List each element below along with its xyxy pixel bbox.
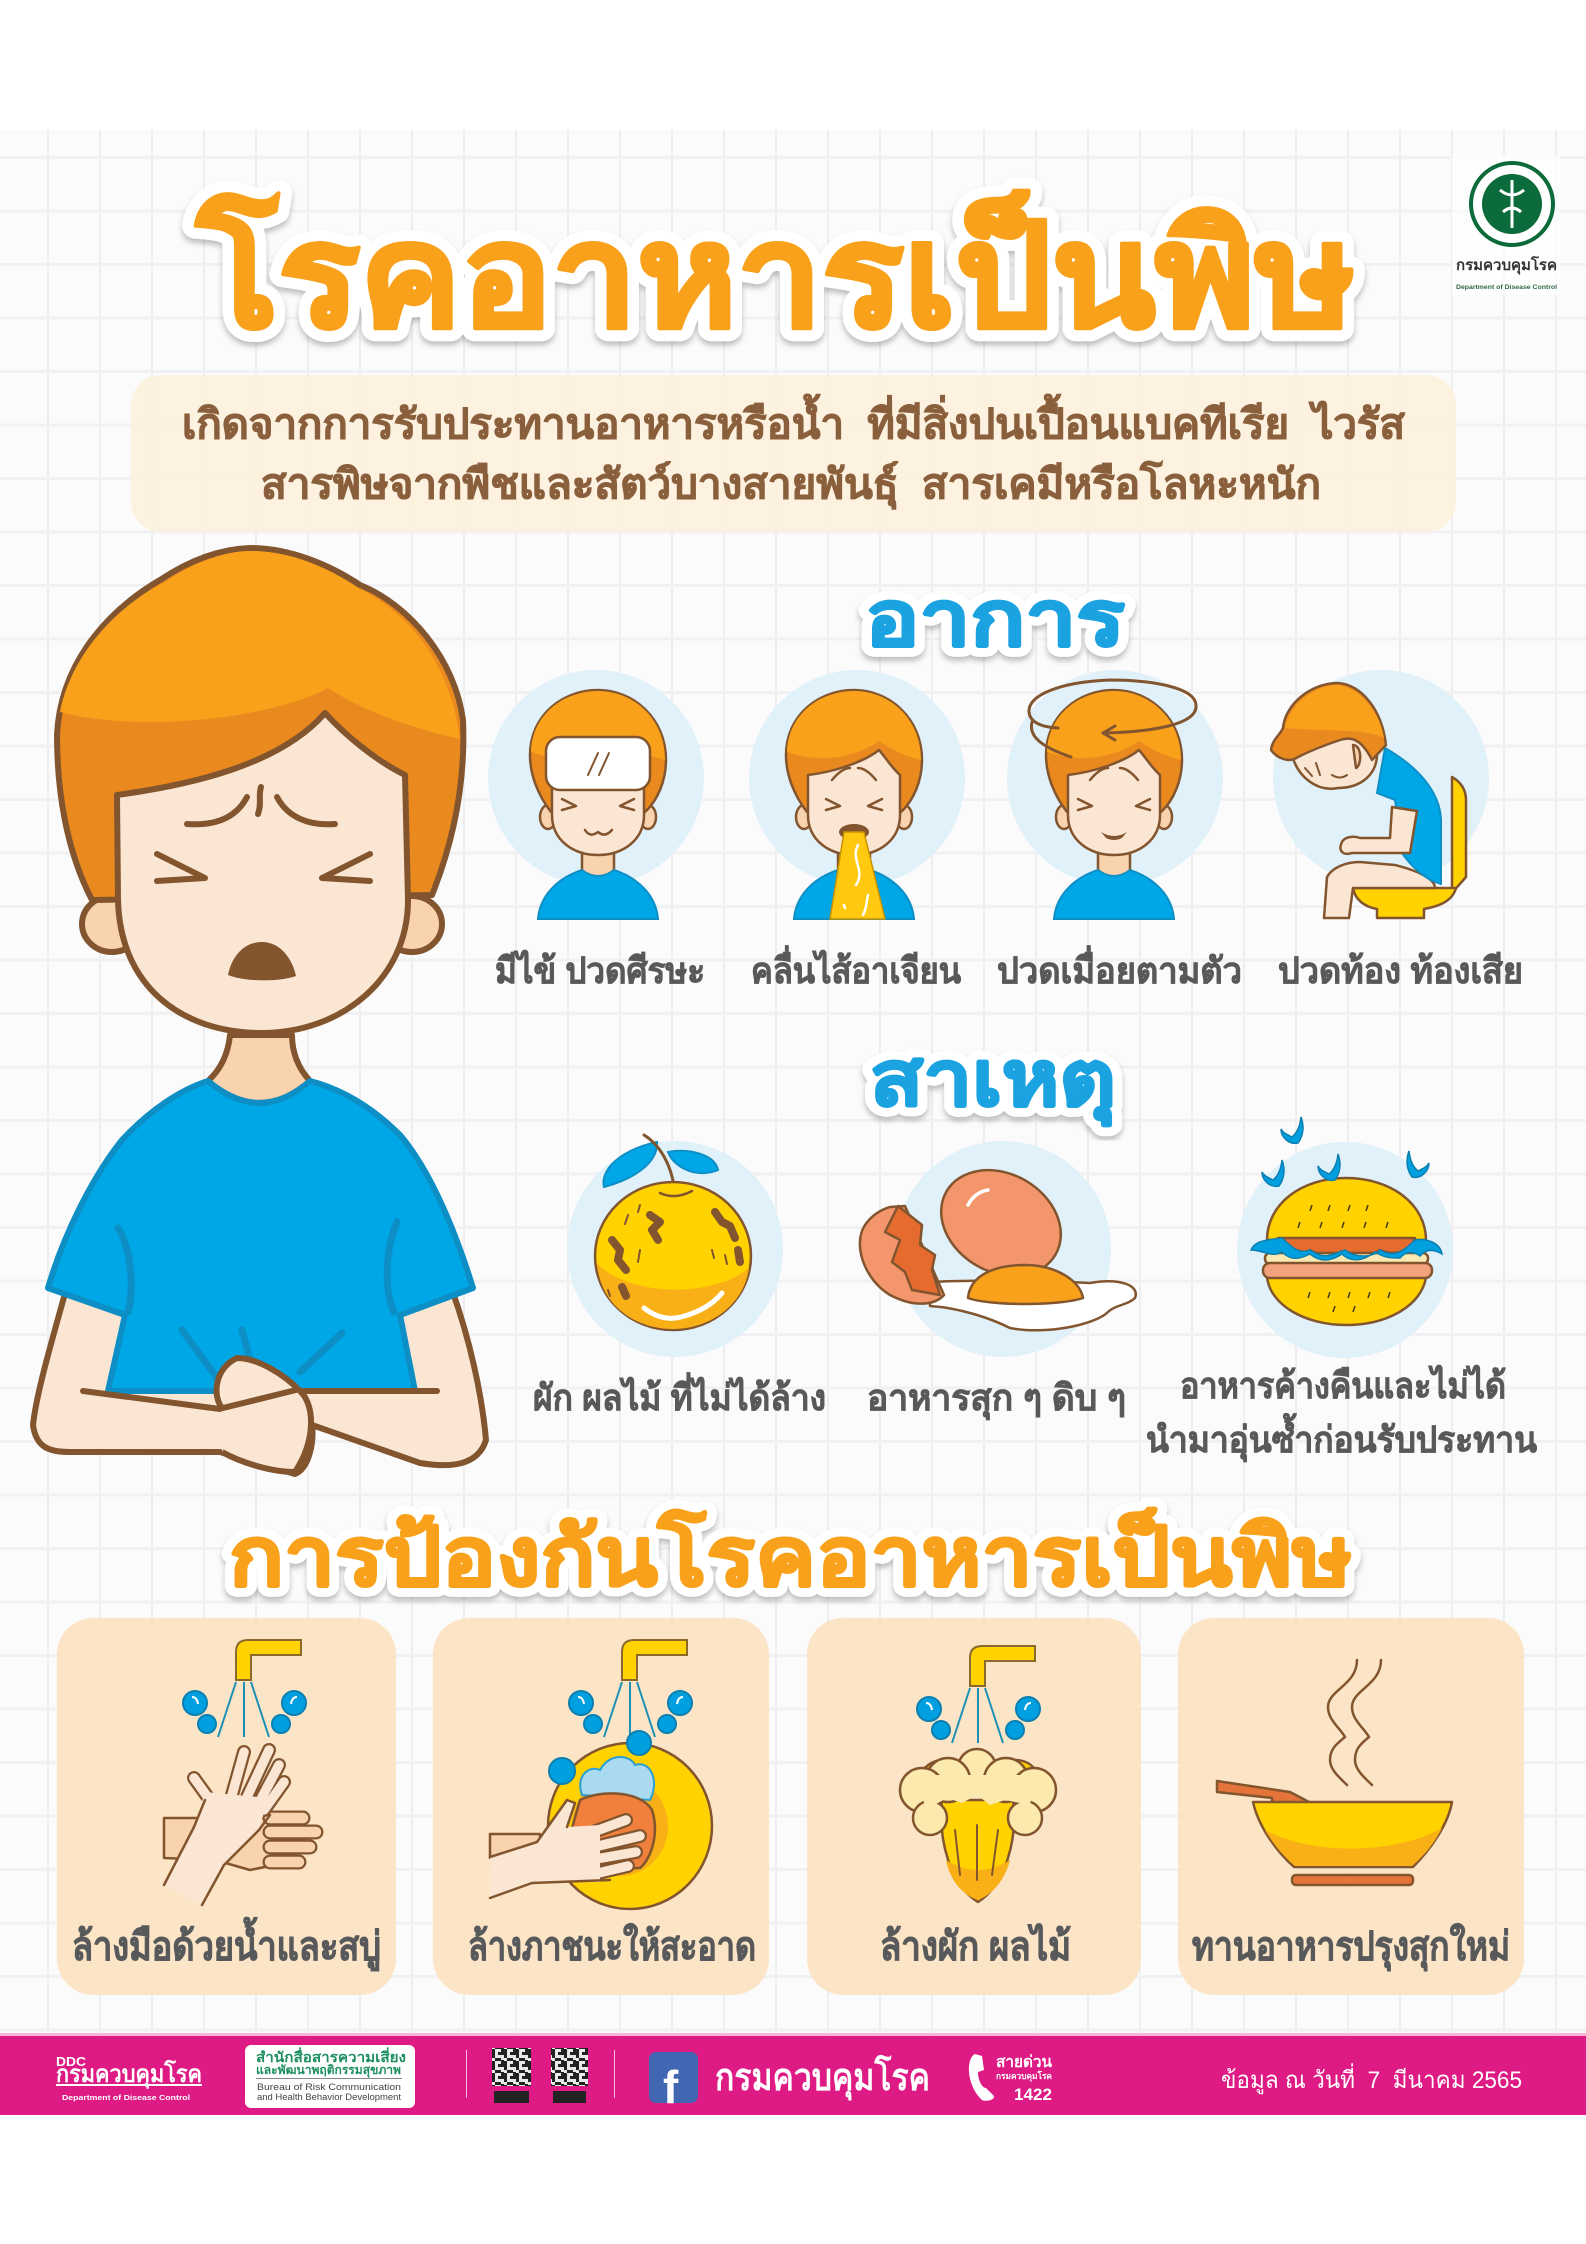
cause: leftover food not reheated (1146, 1117, 1537, 1463)
title: โรคอาหารเป็นพิษ (195, 190, 1355, 357)
symptom: body aches: ปวดเมื่อยตามตัว (997, 945, 1242, 991)
symptom: fever and headache (488, 670, 705, 991)
heading: symptoms: อาการ (865, 577, 1125, 662)
icon: facebook: f (663, 2061, 679, 2113)
cause: leftover food not reheated: นำมาอุ่นซ้ำก่อนรับประทาน (1146, 1413, 1537, 1463)
footer logo: DDC (56, 2054, 202, 2102)
icon: phone hotline: สายด่วน (996, 2054, 1052, 2071)
card: wash hands with soap and water: ล้างมือด้วยน้ำและสบู่ (72, 1917, 381, 1971)
heading: prevention: การป้องกันโรคอาหารเป็นพิษ (229, 1507, 1352, 1603)
footer logo: DDC: Department of Disease Control (62, 2095, 190, 2102)
footer: QR codes (466, 2048, 615, 2103)
symptom: body aches (997, 670, 1242, 991)
card: wash vegetables and fruit (807, 1618, 1141, 1995)
panel: definition (131, 375, 1456, 532)
logo: department of disease control (1452, 155, 1560, 295)
footer logo: bureau of risk communication: สำนักสื่อสารความเสี่ยง (256, 2047, 406, 2065)
footer logo: DDC: กรมควบคุมโรค (56, 2059, 202, 2090)
panel: definition: เกิดจากการรับประทานอาหารหรือน้ำ ที่มีสิ่งปนเปื้อนแบคทีเรีย ไวรัส (182, 394, 1405, 447)
symptom: nausea and vomiting: คลื่นไส้อาเจียน (751, 945, 961, 991)
icon: phone hotline: 1422 (1014, 2085, 1052, 2104)
symptom: stomach ache and diarrhea: ปวดท้อง ท้องเสีย (1278, 950, 1523, 991)
card: eat freshly cooked food (1178, 1618, 1524, 1995)
card: eat freshly cooked food: ทานอาหารปรุงสุกใหม่ (1192, 1923, 1510, 1972)
footer logo: bureau of risk communication: and Health Behavior Development (257, 2092, 402, 2102)
illustration: large boy with stomach ache (33, 548, 486, 1474)
logo: department of disease control: Department of Disease Control (1456, 284, 1557, 291)
heading inner weight: causes: สาเหตุ (870, 1037, 1116, 1127)
symptom: nausea and vomiting (749, 670, 965, 991)
symptom: fever and headache: มีไข้ ปวดศีรษะ (495, 949, 705, 991)
footer logo: bureau of risk communication (245, 2045, 415, 2108)
title inner weight: โรคอาหารเป็นพิษ (195, 190, 1355, 357)
card: wash dishes clean: ล้างภาชนะให้สะอาด (468, 1923, 756, 1969)
cause: unwashed fruit and vegetables: ผัก ผลไม้ ที่ไม่ได้ล้าง (533, 1372, 826, 1418)
heading inner weight: prevention: การป้องกันโรคอาหารเป็นพิษ (229, 1507, 1352, 1603)
cause: undercooked food: อาหารสุก ๆ ดิบ ๆ (867, 1377, 1126, 1421)
heading inner weight: symptoms: อาการ (865, 577, 1125, 662)
card: wash hands with soap and water (57, 1618, 396, 1995)
footer: facebook name: กรมควบคุมโรค (715, 2054, 930, 2101)
logo: department of disease control: กรมควบคุมโรค (1456, 255, 1557, 275)
icon: phone hotline: กรมควบคุมโรค (996, 2070, 1052, 2082)
cause: unwashed fruit and vegetables (533, 1135, 826, 1418)
cause: undercooked food (860, 1141, 1136, 1421)
icon: facebook (649, 2052, 698, 2113)
cause: leftover food not reheated: อาหารค้างคืนและไม่ได้ (1180, 1364, 1506, 1406)
heading: causes: สาเหตุ (870, 1037, 1116, 1127)
footer logo: DDC: DDC (56, 2054, 87, 2069)
footer band (0, 2033, 1586, 2115)
symptom: stomach ache and diarrhea (1271, 670, 1523, 991)
footer logo: bureau of risk communication: Bureau of Risk Communication (257, 2082, 401, 2092)
icon: phone hotline (969, 2054, 1052, 2104)
panel: definition: สารพิษจากพืชและสัตว์บางสายพันธุ์ สารเคมีหรือโลหะหนัก (261, 460, 1321, 510)
footer logo: bureau of risk communication: และพัฒนาพฤติกรรมสุขภาพ (256, 2063, 401, 2078)
footer: date: ข้อมูล ณ วันที่ 7 มีนาคม 2565 (1221, 2063, 1522, 2095)
card: wash vegetables and fruit: ล้างผัก ผลไม้ (880, 1923, 1071, 1969)
card: wash dishes clean (433, 1618, 769, 1995)
